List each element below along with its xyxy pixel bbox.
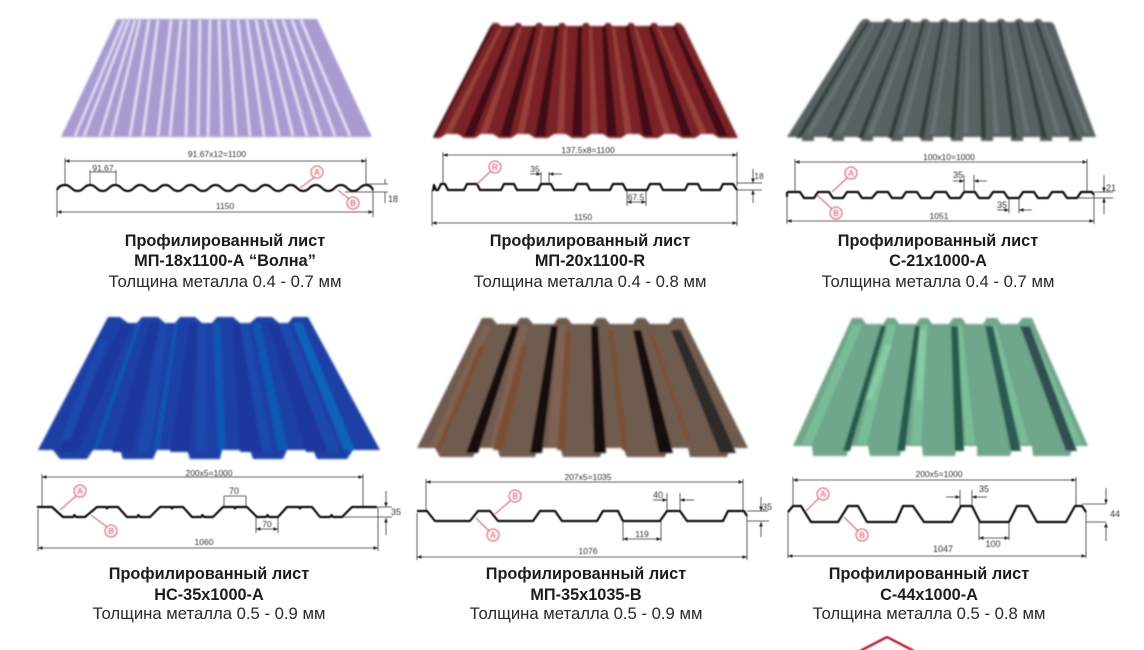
profile diagram [788,469,1120,558]
callout B: B [350,199,356,208]
profile diagram: 200x5=1000 [185,468,233,478]
profile diagram: 137.5x8=1100 [561,145,615,155]
profile diagram: 35 [979,484,989,494]
profile diagram [432,145,764,226]
caption: Толщина металла 0.5 - 0.9 мм [93,604,325,623]
caption: Профилированный лист [125,232,325,250]
profile diagram: 91.67 [92,163,114,173]
icon: red roof chevron [860,637,914,650]
caption: Профилированный лист [109,565,309,583]
caption [109,232,341,291]
callout R [477,161,501,184]
profile diagram: 70 [229,486,239,496]
caption: Толщина металла 0.5 - 0.9 мм [470,604,702,623]
profile diagram: 35 [391,507,401,517]
profile diagram: 35 [530,164,540,174]
callout A: A [490,531,496,540]
callout B [817,195,842,219]
profile diagram: 18 [754,171,764,181]
callout A [476,518,499,541]
caption: Профилированный лист [829,565,1029,583]
profile diagram: 200x5=1000 [915,469,963,479]
sheet image: grey sheet [787,19,1096,141]
callout B: B [833,209,839,218]
profile diagram: 67.5 [628,192,645,202]
profile diagram: 207x5=1035 [564,472,612,482]
caption: С-21х1000-А [889,252,987,270]
callout B: B [512,492,518,501]
profile diagram: 1047 [933,544,953,554]
callout A [60,485,86,510]
sheet image: burgundy sheet [433,23,738,138]
profile diagram: 1150 [574,212,592,222]
profile diagram [417,472,772,560]
profile diagram: 1060 [195,537,214,547]
caption [470,565,702,623]
profile diagram: 18 [388,194,398,204]
callout B [91,515,117,537]
callout A: A [848,169,854,178]
callout A [806,488,829,511]
profile diagram: 119 [635,529,649,539]
sheet image: green sheet [793,318,1088,456]
profile diagram: 40 [653,490,663,500]
callout A: A [820,490,826,499]
panel: МП-35х1035-В [417,318,772,623]
caption [813,565,1045,623]
profile diagram: 1051 [930,211,949,221]
caption [822,232,1054,291]
caption: Толщина металла 0.4 - 0.8 мм [474,272,706,291]
caption: Профилированный лист [838,232,1038,250]
panel: НС-35х1000-А [37,317,401,623]
callout B [495,490,521,514]
panel: МП-18х1100-А Волна [57,19,398,291]
sheet image: lavender corrugated sheet [61,19,372,137]
profile diagram: 70 [262,519,272,529]
caption: Толщина металла 0.5 - 0.8 мм [813,604,1045,623]
profile diagram [37,468,401,551]
callout B: B [108,527,114,536]
caption: С-44х1000-А [880,586,978,604]
profile diagram: 44 [1110,509,1120,519]
callout B [338,190,359,209]
profile diagram: 1150 [216,201,234,211]
callout A [832,167,857,192]
profile diagram: 35 [997,200,1007,210]
panel: С-44х1000-А [788,318,1120,623]
sheet image: blue sheet [38,317,380,459]
caption: НС-35х1000-А [154,586,264,604]
sheet image: brown sheet [417,318,748,457]
callout R: R [492,163,498,172]
callout A: A [77,487,83,496]
caption: Профилированный лист [486,565,686,583]
callout A [300,166,323,188]
callout B [844,517,868,541]
caption: МП-20х1100-R [535,252,645,270]
profile diagram: 21 [1106,183,1116,193]
profile diagram [787,152,1116,224]
profile diagram: 35 [953,170,963,180]
profile diagram [57,149,398,217]
profile diagram: 35 [762,502,772,512]
callout B: B [859,531,865,540]
profile diagram: 1076 [579,546,598,556]
profile diagram: 100 [985,539,1001,549]
profile diagram: 91.67x12=1100 [188,149,246,159]
caption: Профилированный лист [490,232,690,250]
caption: Толщина металла 0.4 - 0.7 мм [822,272,1054,291]
panel: С-21х1000-А [787,19,1116,291]
caption [93,565,325,623]
caption: МП-18х1100-А “Волна” [134,252,316,270]
caption: Толщина металла 0.4 - 0.7 мм [109,272,341,291]
profile diagram: 100x10=1000 [923,152,975,162]
caption: МП-35х1035-В [530,586,642,604]
panel: МП-20х1100-R [432,23,764,291]
callout A: A [314,168,320,177]
caption [474,232,706,291]
